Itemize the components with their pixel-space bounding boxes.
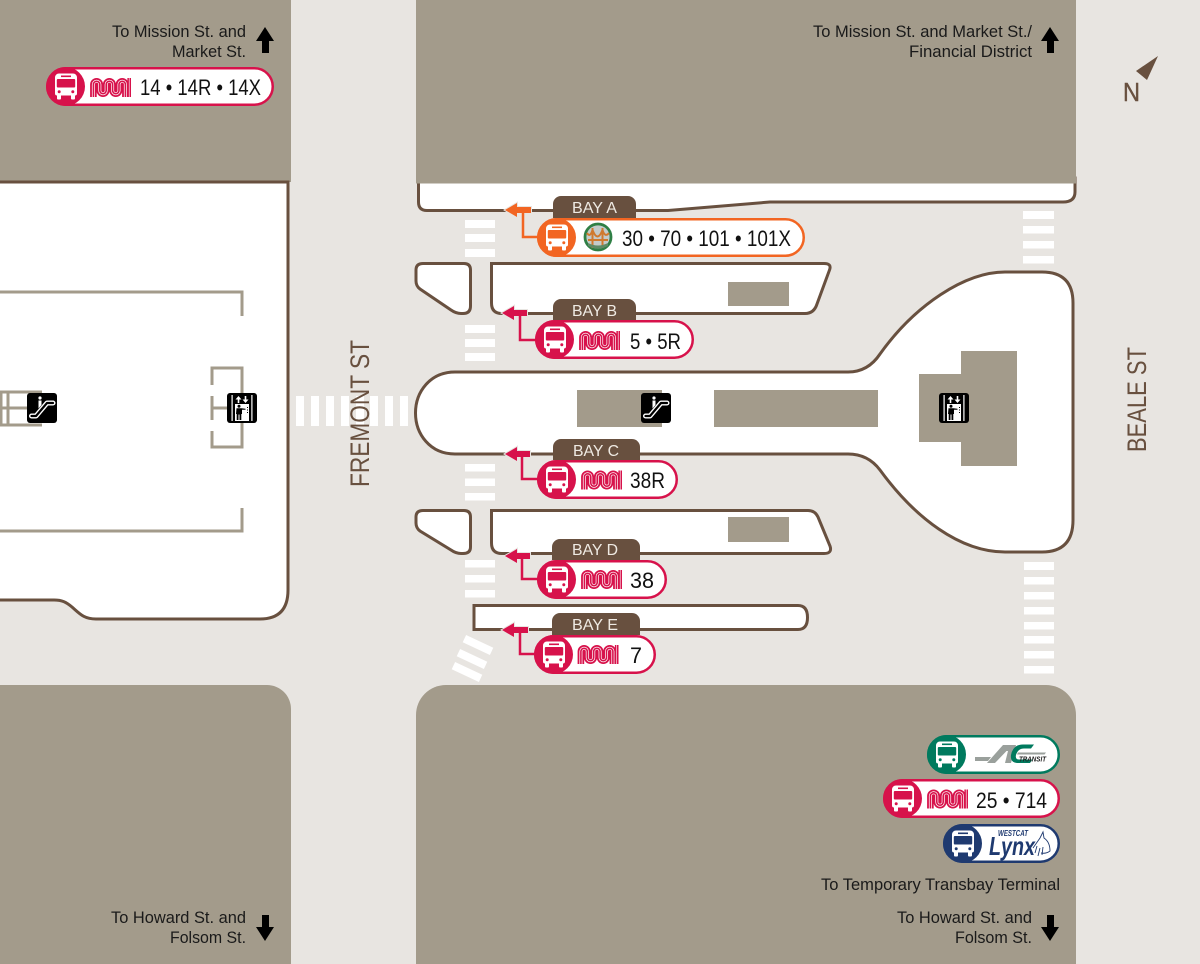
bay B callout bbox=[502, 299, 693, 359]
logo: WestCAT Lynx: Lynx bbox=[989, 831, 1036, 861]
icon: elevator (left) bbox=[227, 393, 257, 423]
icon: elevator (east) bbox=[939, 393, 969, 423]
route pill: Muni 5 bbox=[535, 320, 693, 359]
strip platform: bay A bbox=[418, 178, 1075, 210]
bay tab B bbox=[553, 299, 636, 320]
route pill: WestCAT Lynx bbox=[943, 824, 1059, 863]
street label: Fremont St: FREMONT ST bbox=[345, 340, 375, 487]
bay A callout bbox=[505, 196, 804, 257]
city block: top centre bbox=[416, 0, 1076, 184]
shelter: bay D bbox=[728, 517, 789, 542]
small island: north bbox=[416, 264, 470, 314]
strip platform: bay E bbox=[474, 606, 808, 630]
bay tab E: BAY E bbox=[572, 617, 618, 634]
route pill: Muni 7: 7 bbox=[630, 643, 642, 668]
route pill: Muni 38 bbox=[537, 560, 666, 599]
direction note: bottom right bbox=[897, 908, 1059, 947]
north indicator: N bbox=[1123, 77, 1140, 107]
logo: WestCAT Lynx: WESTCAT bbox=[998, 828, 1029, 838]
bay tab B: BAY B bbox=[572, 303, 617, 320]
direction note: bottom left bbox=[111, 908, 274, 947]
island: bay D bbox=[492, 510, 831, 554]
direction note: bottom left: Folsom St. bbox=[170, 928, 246, 947]
route pill: Muni 25, 714 bbox=[883, 779, 1059, 818]
elevator shaft outline bbox=[212, 368, 242, 447]
arrow: bay B bbox=[502, 306, 538, 340]
bay C callout bbox=[505, 439, 677, 499]
bay tab E bbox=[552, 613, 640, 635]
icon: escalator (left) bbox=[27, 393, 57, 423]
bay tab C bbox=[553, 439, 640, 460]
route pill: Golden Gate Transit bbox=[537, 218, 804, 257]
arrow: bay A bbox=[505, 203, 540, 237]
route pill: Muni 38R: 38R bbox=[630, 468, 665, 493]
direction note: top left: To Mission St. and bbox=[112, 22, 246, 41]
logo: AC Transit: TRANSIT bbox=[1019, 754, 1047, 764]
direction note: bottom right: Folsom St. bbox=[955, 928, 1032, 947]
logo: Golden Gate Transit bbox=[585, 224, 611, 250]
bay E callout bbox=[502, 613, 655, 674]
central platform bbox=[416, 272, 1073, 552]
route pill: Golden Gate Transit: 30 • 70 • 101 • 101X bbox=[622, 226, 791, 251]
direction note: top right bbox=[813, 22, 1059, 61]
arrow: bay E bbox=[502, 623, 537, 654]
arrow: bay D bbox=[505, 549, 540, 579]
route pill: Muni 5: 5 • 5R bbox=[630, 329, 681, 354]
bay tab C: BAY C bbox=[573, 443, 619, 460]
city block: bottom centre bbox=[416, 685, 1076, 964]
icon: escalator (centre) bbox=[641, 393, 671, 423]
route pill: Muni 7 bbox=[534, 635, 655, 674]
building: centre bbox=[714, 390, 878, 427]
crosswalks bbox=[296, 211, 1054, 682]
direction note: temporary terminal: To Temporary Transbay Terminal bbox=[821, 875, 1060, 894]
direction note: top right: Financial District bbox=[909, 42, 1032, 61]
direction note: top left bbox=[112, 22, 274, 61]
direction note: bottom right: To Howard St. and bbox=[897, 908, 1032, 927]
direction note: top left: Market St. bbox=[172, 42, 246, 61]
city block: top left bbox=[0, 0, 291, 182]
island: bay B bbox=[492, 264, 830, 314]
arrow: bay C bbox=[505, 447, 540, 479]
bay tab D bbox=[552, 539, 640, 560]
route pill: Muni 14: 14 • 14R • 14X bbox=[140, 75, 261, 100]
direction note: top right: To Mission St. and Market St./ bbox=[813, 22, 1032, 41]
bay tab A: BAY A bbox=[572, 200, 617, 217]
route pill: Muni 38R bbox=[537, 460, 677, 499]
shelter: bay B bbox=[728, 282, 789, 306]
route pill: Muni 38: 38 bbox=[630, 568, 654, 593]
route pill: AC Transit bbox=[927, 735, 1059, 774]
route pill: Muni 25, 714: 25 • 714 bbox=[976, 788, 1047, 813]
street label: Beale St: BEALE ST bbox=[1122, 347, 1152, 452]
route pill: Muni 14 bbox=[46, 67, 273, 106]
direction note: bottom left: To Howard St. and bbox=[111, 908, 246, 927]
bay D callout bbox=[505, 539, 666, 599]
north indicator bbox=[1123, 56, 1158, 107]
left building platform bbox=[0, 182, 288, 619]
platform inner walls bbox=[0, 292, 242, 531]
small island: south bbox=[416, 510, 470, 554]
building: east end bbox=[919, 351, 1017, 466]
building: centre left bbox=[577, 390, 662, 427]
bay tab D: BAY D bbox=[572, 542, 618, 559]
bay tab A bbox=[553, 196, 636, 218]
city block: bottom left bbox=[0, 685, 291, 964]
